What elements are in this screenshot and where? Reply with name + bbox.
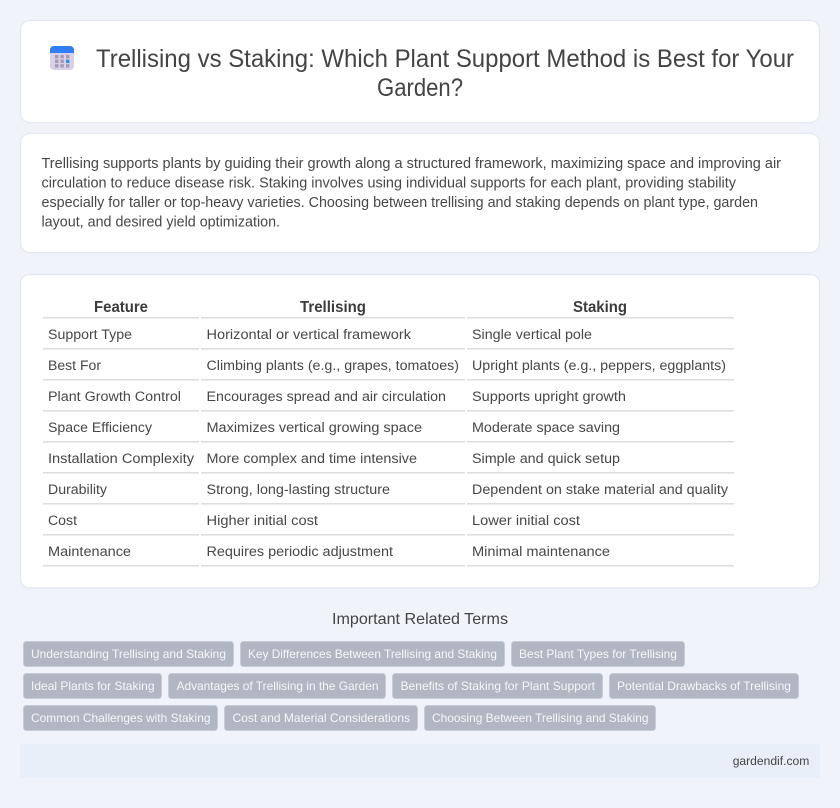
chip: Best Plant Types for Trellising (519, 647, 677, 661)
chip: Benefits of Staking for Plant Support (400, 679, 596, 693)
chip: Potential Drawbacks of Trellising (617, 679, 791, 693)
chip: Understanding Trellising and Staking (31, 647, 226, 661)
chip: Common Challenges with Staking (31, 711, 210, 725)
chip (24, 674, 162, 698)
row: cost: Lower initial cost (472, 512, 580, 528)
heading: important related terms: Important Related Terms (332, 611, 508, 628)
chip (168, 674, 386, 698)
row: space efficiency: Moderate space saving (472, 419, 620, 435)
heading: Trellising vs Staking: Which Plant Support Method is Best for Your (96, 45, 794, 73)
table header: Trellising (300, 299, 366, 316)
chip (610, 674, 798, 698)
row: durability: Durability (48, 481, 108, 497)
row: best for: Upright plants (e.g., peppers, eggplants) (472, 357, 726, 373)
chip: Ideal Plants for Staking (31, 679, 154, 693)
panel: title (20, 20, 820, 122)
panel: intro paragraph: circulation to reduce disease risk. Staking involves using individual supports for each plant, providing stability (42, 176, 737, 192)
row: maintenance (43, 543, 734, 567)
row: space efficiency (43, 419, 734, 443)
row: installation complexity: Installation Complexity (48, 450, 195, 466)
row: space efficiency: Maximizes vertical growing space (206, 419, 422, 435)
table header: Staking (573, 299, 627, 316)
chip (24, 642, 234, 666)
row: support type: Support Type (48, 326, 132, 342)
row: support type (43, 326, 734, 350)
panel: intro paragraph: especially for taller or top-heavy varieties. Choosing between trellising and staking depends on plant type, garden (42, 195, 758, 211)
row: support type: Horizontal or vertical framework (206, 326, 412, 342)
chip (424, 706, 656, 730)
chip (512, 642, 684, 666)
chip: Key Differences Between Trellising and Staking (248, 647, 497, 661)
chip: Choosing Between Trellising and Staking (432, 711, 648, 725)
panel: comparison table (20, 274, 820, 588)
heading (96, 45, 794, 102)
table header: Feature (94, 299, 148, 316)
chip: Advantages of Trellising in the Garden (176, 679, 378, 693)
row: cost: Higher initial cost (206, 512, 318, 528)
row: durability: Dependent on stake material and quality (472, 481, 729, 497)
row: best for: Climbing plants (e.g., grapes, tomatoes) (206, 357, 459, 373)
row: plant growth control (43, 388, 734, 412)
row: maintenance: Maintenance (48, 543, 131, 559)
row: installation complexity: Simple and quick setup (472, 450, 620, 466)
row: best for (43, 357, 734, 381)
icon: calendar (50, 46, 74, 70)
row: durability (43, 481, 734, 505)
row: best for: Best For (48, 357, 101, 373)
chip: Cost and Material Considerations (232, 711, 410, 725)
row: cost (43, 512, 734, 536)
row: support type: Single vertical pole (472, 326, 592, 342)
chip (240, 642, 504, 666)
footer (20, 744, 820, 778)
panel: intro paragraph: layout, and desired yield optimization. (42, 214, 280, 230)
row: maintenance: Requires periodic adjustment (206, 543, 393, 559)
row: cost: Cost (48, 512, 77, 528)
panel: intro paragraph: Trellising supports plants by guiding their growth along a structured framework, maximizing space and improving air (42, 156, 781, 172)
row: maintenance: Minimal maintenance (472, 543, 610, 559)
row: durability: Strong, long-lasting structure (206, 481, 390, 497)
panel: intro paragraph (20, 134, 820, 252)
row: plant growth control: Encourages spread and air circulation (206, 388, 446, 404)
table header (43, 299, 734, 319)
chip (392, 674, 602, 698)
row: space efficiency: Space Efficiency (48, 419, 153, 435)
row: installation complexity (43, 450, 734, 474)
row: installation complexity: More complex and time intensive (206, 450, 417, 466)
footer: gardendif.com (733, 754, 809, 768)
related term chips (24, 642, 798, 730)
row: plant growth control: Plant Growth Control (48, 388, 181, 404)
chip (224, 706, 418, 730)
row: plant growth control: Supports upright growth (472, 388, 626, 404)
chip (24, 706, 218, 730)
heading: Garden? (377, 74, 463, 102)
